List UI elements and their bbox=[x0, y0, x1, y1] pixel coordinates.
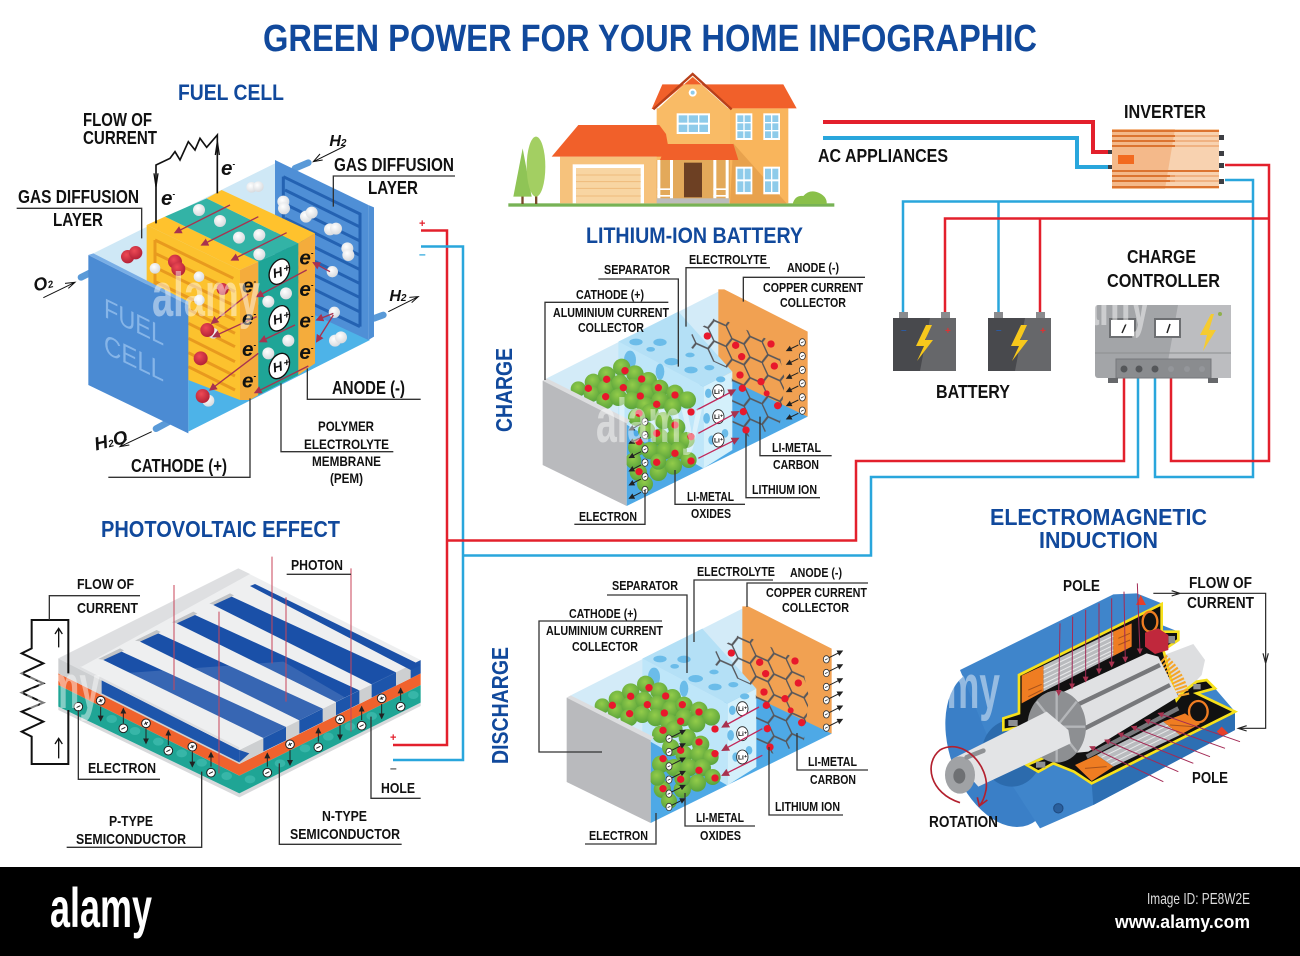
discharge labels: COLLECTOR bbox=[782, 600, 850, 615]
panel: electromagnetic induction bbox=[925, 504, 1268, 842]
reaction arrows bbox=[175, 205, 333, 393]
watermark overlays bbox=[0, 261, 1150, 722]
fuel cell labels: CATHODE (+) bbox=[131, 456, 227, 476]
photovoltaic labels bbox=[76, 557, 415, 848]
electrons: e bbox=[299, 278, 311, 301]
battery diagram: charge: Li⁺ bbox=[714, 389, 724, 396]
label: ac appliances: AC APPLIANCES bbox=[818, 146, 948, 166]
generator labels: CURRENT bbox=[1187, 595, 1254, 612]
battery 2 bbox=[988, 312, 1051, 371]
gas labels bbox=[31, 133, 407, 455]
heading: electromagnetic induction bbox=[990, 504, 1207, 553]
charge labels: LITHIUM ION bbox=[752, 482, 817, 497]
footer bar bbox=[0, 867, 1300, 956]
gas inlet and outlet arrows bbox=[43, 146, 418, 447]
fuel cell labels: ELECTROLYTE bbox=[304, 436, 389, 452]
charge labels: OXIDES bbox=[691, 506, 731, 521]
photovoltaic labels: SEMICONDUCTOR bbox=[290, 826, 400, 843]
discharge labels: SEPARATOR bbox=[612, 578, 678, 593]
fuel cell diagram bbox=[17, 133, 455, 477]
charge labels: SEPARATOR bbox=[604, 262, 670, 277]
alamy logo: alamy bbox=[50, 876, 152, 939]
heading: electromagnetic induction: ELECTROMAGNETIC bbox=[990, 504, 1207, 530]
discharge labels: LITHIUM ION bbox=[775, 799, 840, 814]
electrons: - bbox=[253, 372, 256, 381]
electrons: - bbox=[253, 277, 256, 286]
charge labels: ELECTROLYTE bbox=[689, 252, 767, 267]
fuel cell labels: POLYMER bbox=[318, 418, 374, 434]
fuel cell labels: GAS DIFFUSION bbox=[334, 155, 454, 175]
website: www.alamy.com bbox=[1114, 912, 1250, 932]
circuit: flow of current bbox=[156, 135, 217, 223]
heading: lithium-ion battery: LITHIUM-ION BATTERY bbox=[586, 223, 803, 248]
battery diagram: charge bbox=[543, 268, 865, 524]
electrons: - bbox=[311, 280, 314, 289]
battery diagram: discharge: Li⁺ bbox=[738, 706, 748, 713]
rotation arrow bbox=[931, 747, 987, 806]
label: inverter: INVERTER bbox=[1124, 102, 1206, 122]
battery diagram: charge: Li⁺ bbox=[714, 414, 724, 421]
gas labels: O2 bbox=[31, 271, 55, 296]
battery 2: + bbox=[1040, 326, 1046, 337]
photovoltaic labels: SEMICONDUCTOR bbox=[76, 831, 186, 848]
image id: Image ID: PE8W2E bbox=[1147, 891, 1250, 908]
charge labels: CARBON bbox=[773, 457, 819, 472]
bush bbox=[793, 191, 827, 204]
stator and coils bbox=[1008, 612, 1208, 781]
charge labels: COLLECTOR bbox=[780, 295, 846, 310]
electrons: e bbox=[299, 246, 311, 269]
label: discharge: DISCHARGE bbox=[487, 647, 513, 764]
photovoltaic labels: P-TYPE bbox=[109, 813, 153, 830]
electrons: - bbox=[311, 249, 314, 258]
watermark overlays: alamy bbox=[596, 387, 702, 456]
electrons: e bbox=[242, 275, 253, 298]
magnetic field arrows bbox=[1059, 583, 1240, 782]
discharge labels: ELECTRON bbox=[589, 828, 648, 843]
heading: fuel cell: FUEL CELL bbox=[178, 80, 284, 105]
solar cell diagram bbox=[22, 557, 421, 847]
fuel cell labels: (PEM) bbox=[330, 470, 363, 486]
photovoltaic labels: PHOTON bbox=[291, 557, 343, 574]
label: charge controller: CONTROLLER bbox=[1107, 271, 1220, 291]
battery diagram: charge: Li⁺ bbox=[714, 437, 724, 444]
charge labels: ANODE (-) bbox=[787, 260, 839, 275]
wiring between components: – bbox=[419, 247, 426, 261]
electrons: - bbox=[232, 159, 235, 168]
charge labels: COLLECTOR bbox=[578, 320, 644, 335]
hydrogen ions: H⁺ bbox=[271, 309, 293, 328]
fuel cell labels: GAS DIFFUSION bbox=[18, 187, 139, 207]
electrons and holes bbox=[74, 688, 405, 777]
wiring between components: + bbox=[390, 732, 396, 744]
charge labels: ALUMINIUM CURRENT bbox=[553, 305, 669, 320]
gas labels: H2 bbox=[389, 288, 407, 305]
charge labels: CATHODE (+) bbox=[576, 287, 644, 302]
fuel cell labels: FLOW OF bbox=[83, 110, 152, 130]
electrons: e bbox=[299, 309, 311, 332]
charge labels bbox=[553, 252, 863, 524]
right shaft end bbox=[1160, 644, 1205, 698]
charge labels: ELECTRON bbox=[579, 509, 637, 524]
electrons: e bbox=[161, 187, 172, 210]
discharge labels: ALUMINIUM CURRENT bbox=[546, 623, 663, 638]
discharge labels: LI-METAL bbox=[808, 754, 857, 769]
discharge labels: COPPER CURRENT bbox=[766, 585, 867, 600]
electrons: e bbox=[221, 157, 232, 180]
battery diagram: discharge: Li⁺ bbox=[738, 731, 748, 738]
battery 1 bbox=[893, 312, 956, 371]
discharge labels: CARBON bbox=[810, 772, 856, 787]
charge labels: COPPER CURRENT bbox=[763, 280, 863, 295]
hydrogen ions bbox=[265, 256, 294, 382]
title: GREEN POWER FOR YOUR HOME INFOGRAPHIC bbox=[263, 18, 1037, 60]
electrons bbox=[161, 157, 314, 392]
gas labels: H2O bbox=[92, 426, 130, 455]
label: charge controller: CHARGE bbox=[1127, 247, 1196, 267]
electrons: - bbox=[253, 340, 256, 349]
photon rays bbox=[174, 557, 351, 773]
discharge labels: LI-METAL bbox=[696, 810, 744, 825]
rotor bbox=[945, 653, 1183, 794]
battery diagram: discharge: Li⁺ bbox=[738, 754, 748, 761]
generator labels bbox=[929, 575, 1254, 831]
circuit: resistor and current arrows bbox=[22, 620, 68, 764]
electrons: e bbox=[299, 341, 311, 364]
generator labels: POLE bbox=[1192, 770, 1228, 787]
fuel cell lettering on plate: CELL bbox=[104, 329, 164, 389]
cutaway housing bbox=[1003, 604, 1235, 783]
hydrogen and oxygen molecules bbox=[121, 181, 354, 407]
discharge labels bbox=[546, 564, 867, 843]
brush and terminals bbox=[1136, 595, 1228, 736]
batteries bbox=[893, 312, 1051, 402]
gas labels: H2 bbox=[329, 133, 347, 150]
watermark overlays: alamy bbox=[152, 261, 260, 330]
fuel cell labels: ANODE (-) bbox=[332, 378, 405, 398]
label: battery: BATTERY bbox=[936, 382, 1010, 402]
electrons: - bbox=[311, 312, 314, 321]
fuel cell labels: LAYER bbox=[53, 210, 103, 230]
panel: lithium-ion battery bbox=[487, 223, 868, 844]
panel: fuel cell bbox=[17, 80, 455, 486]
battery diagram: discharge bbox=[567, 606, 842, 823]
electrons: e bbox=[242, 307, 253, 330]
leader lines bbox=[49, 574, 421, 847]
discharge labels: CATHODE (+) bbox=[569, 606, 637, 621]
battery 1: – bbox=[901, 325, 907, 336]
generator labels: ROTATION bbox=[929, 814, 998, 831]
electrons: e bbox=[242, 369, 253, 392]
label: charge controller bbox=[1107, 247, 1220, 291]
fuel cell labels bbox=[18, 110, 454, 486]
generator diagram bbox=[925, 583, 1268, 842]
wiring between components: + bbox=[419, 218, 425, 230]
charge labels: LI-METAL bbox=[687, 489, 734, 504]
discharge labels: COLLECTOR bbox=[572, 639, 638, 654]
fuel cell labels: CURRENT bbox=[83, 128, 157, 148]
fuel cell labels: MEMBRANE bbox=[312, 453, 381, 469]
heading: electromagnetic induction: INDUCTION bbox=[1039, 527, 1158, 553]
heading: photovoltaic effect: PHOTOVOLTAIC EFFECT bbox=[101, 516, 340, 542]
watermark overlays: alamy bbox=[1050, 270, 1150, 339]
label: charge: CHARGE bbox=[491, 348, 517, 432]
flow of current wire bbox=[1153, 591, 1268, 731]
discharge labels: OXIDES bbox=[700, 828, 741, 843]
fuel cell lettering on plate: FUEL bbox=[104, 293, 164, 353]
photovoltaic labels: CURRENT bbox=[77, 600, 138, 617]
watermark overlays: alamy bbox=[0, 653, 100, 722]
electrons: e bbox=[242, 338, 253, 361]
battery 1: + bbox=[945, 326, 951, 337]
hydrogen ions: H⁺ bbox=[271, 356, 293, 375]
inverter bbox=[1108, 102, 1224, 189]
charge controller bbox=[1095, 247, 1231, 383]
discharge labels: ANODE (-) bbox=[790, 565, 842, 580]
photovoltaic labels: N-TYPE bbox=[322, 808, 367, 825]
photovoltaic labels: HOLE bbox=[381, 780, 415, 797]
photovoltaic labels: FLOW OF bbox=[77, 576, 134, 593]
wiring between components bbox=[390, 122, 1269, 775]
house illustration bbox=[508, 74, 834, 207]
panel: photovoltaic effect bbox=[22, 516, 421, 848]
watermark overlays: alamy bbox=[895, 653, 1000, 722]
electrons: - bbox=[253, 309, 256, 318]
generator labels: FLOW OF bbox=[1189, 575, 1252, 592]
fuel cell labels: LAYER bbox=[368, 178, 418, 198]
leader lines bbox=[17, 176, 455, 477]
discharge labels: ELECTROLYTE bbox=[697, 564, 775, 579]
discharge leader lines bbox=[539, 580, 868, 844]
trees bbox=[513, 137, 545, 204]
generator labels: POLE bbox=[1063, 578, 1100, 595]
electrons: - bbox=[311, 343, 314, 352]
hydrogen ions: H⁺ bbox=[271, 262, 293, 281]
photovoltaic labels: ELECTRON bbox=[88, 760, 156, 777]
fuel cell lettering on plate bbox=[104, 293, 164, 389]
electrons: - bbox=[172, 189, 175, 198]
battery 2: – bbox=[996, 325, 1002, 336]
wiring between components: – bbox=[390, 761, 397, 775]
charge labels: LI-METAL bbox=[772, 440, 821, 455]
